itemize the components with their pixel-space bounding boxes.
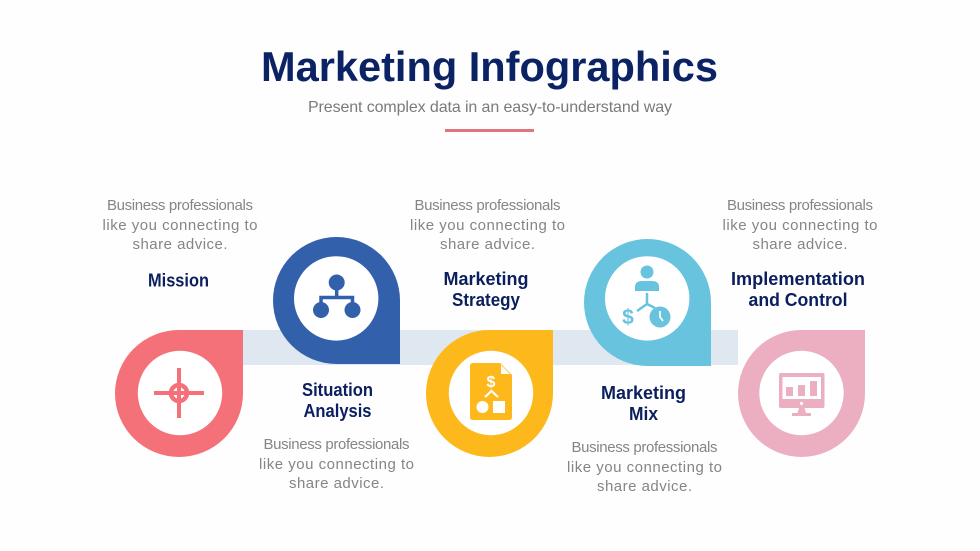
marketing strategy heading: [444, 269, 528, 310]
situation analysis heading: Analysis: [304, 401, 372, 421]
icon: monitor with bar chart: [779, 373, 824, 416]
icon: document: $: [487, 374, 496, 391]
mission description: Business professionals: [107, 197, 253, 214]
implementation description: share advice.: [752, 236, 848, 253]
marketing strategy description: share advice.: [440, 236, 535, 253]
icon: person, dollar and clock: $: [622, 306, 634, 329]
mission description: like you connecting to: [102, 217, 258, 234]
implementation heading: Implementation: [731, 269, 865, 289]
marketing mix description: share advice.: [597, 478, 692, 495]
implementation description: [722, 197, 878, 253]
icon: hierarchy: [313, 274, 360, 318]
marketing mix inner circle: [605, 256, 689, 341]
situation analysis heading: [302, 380, 373, 421]
mission inner circle: [138, 351, 222, 435]
marketing strategy heading: Marketing: [444, 269, 528, 289]
situation analysis description: share advice.: [289, 475, 384, 492]
marketing mix pin: [584, 239, 711, 366]
panel: situation analysis: [259, 237, 414, 492]
marketing strategy description: like you connecting to: [410, 217, 565, 234]
title underline: [445, 129, 534, 132]
situation analysis description: Business professionals: [264, 436, 410, 453]
marketing strategy inner circle: [449, 351, 533, 435]
marketing mix description: like you connecting to: [567, 459, 722, 476]
implementation heading: [731, 269, 865, 310]
panel: mission: [102, 197, 258, 457]
marketing mix description: [567, 439, 722, 495]
subtitle: Present complex data in an easy-to-understand way: [308, 99, 672, 116]
mission description: [102, 197, 258, 253]
mission pin: [115, 330, 243, 457]
marketing mix heading: Mix: [629, 404, 658, 424]
implementation inner circle: [759, 351, 844, 435]
mission description: share advice.: [132, 236, 228, 253]
mission heading: Mission: [148, 270, 209, 290]
implementation heading: and Control: [748, 290, 848, 310]
marketing mix description: Business professionals: [572, 439, 718, 456]
situation analysis heading: Situation: [302, 380, 373, 400]
situation analysis pin: [273, 237, 400, 364]
marketing strategy description: Business professionals: [414, 197, 560, 214]
panel: marketing mix: [567, 239, 722, 495]
panel: implementation and control: [722, 197, 878, 457]
implementation description: Business professionals: [727, 197, 873, 214]
panel: marketing strategy: [410, 197, 565, 457]
situation analysis description: like you connecting to: [259, 456, 414, 473]
marketing strategy description: [410, 197, 565, 253]
implementation pin: [738, 330, 865, 457]
title: Marketing Infographics: [261, 43, 718, 90]
situation analysis inner circle: [294, 256, 378, 341]
implementation description: like you connecting to: [722, 217, 878, 234]
situation analysis description: [259, 436, 414, 492]
connecting band: [243, 330, 738, 365]
icon: document: [470, 363, 512, 420]
marketing mix heading: [601, 383, 686, 424]
icon: person, dollar and clock: [622, 266, 670, 329]
icon: crosshair: [154, 368, 204, 418]
marketing mix heading: Marketing: [601, 383, 686, 403]
marketing strategy pin: [426, 330, 553, 457]
marketing strategy heading: Strategy: [452, 290, 520, 310]
